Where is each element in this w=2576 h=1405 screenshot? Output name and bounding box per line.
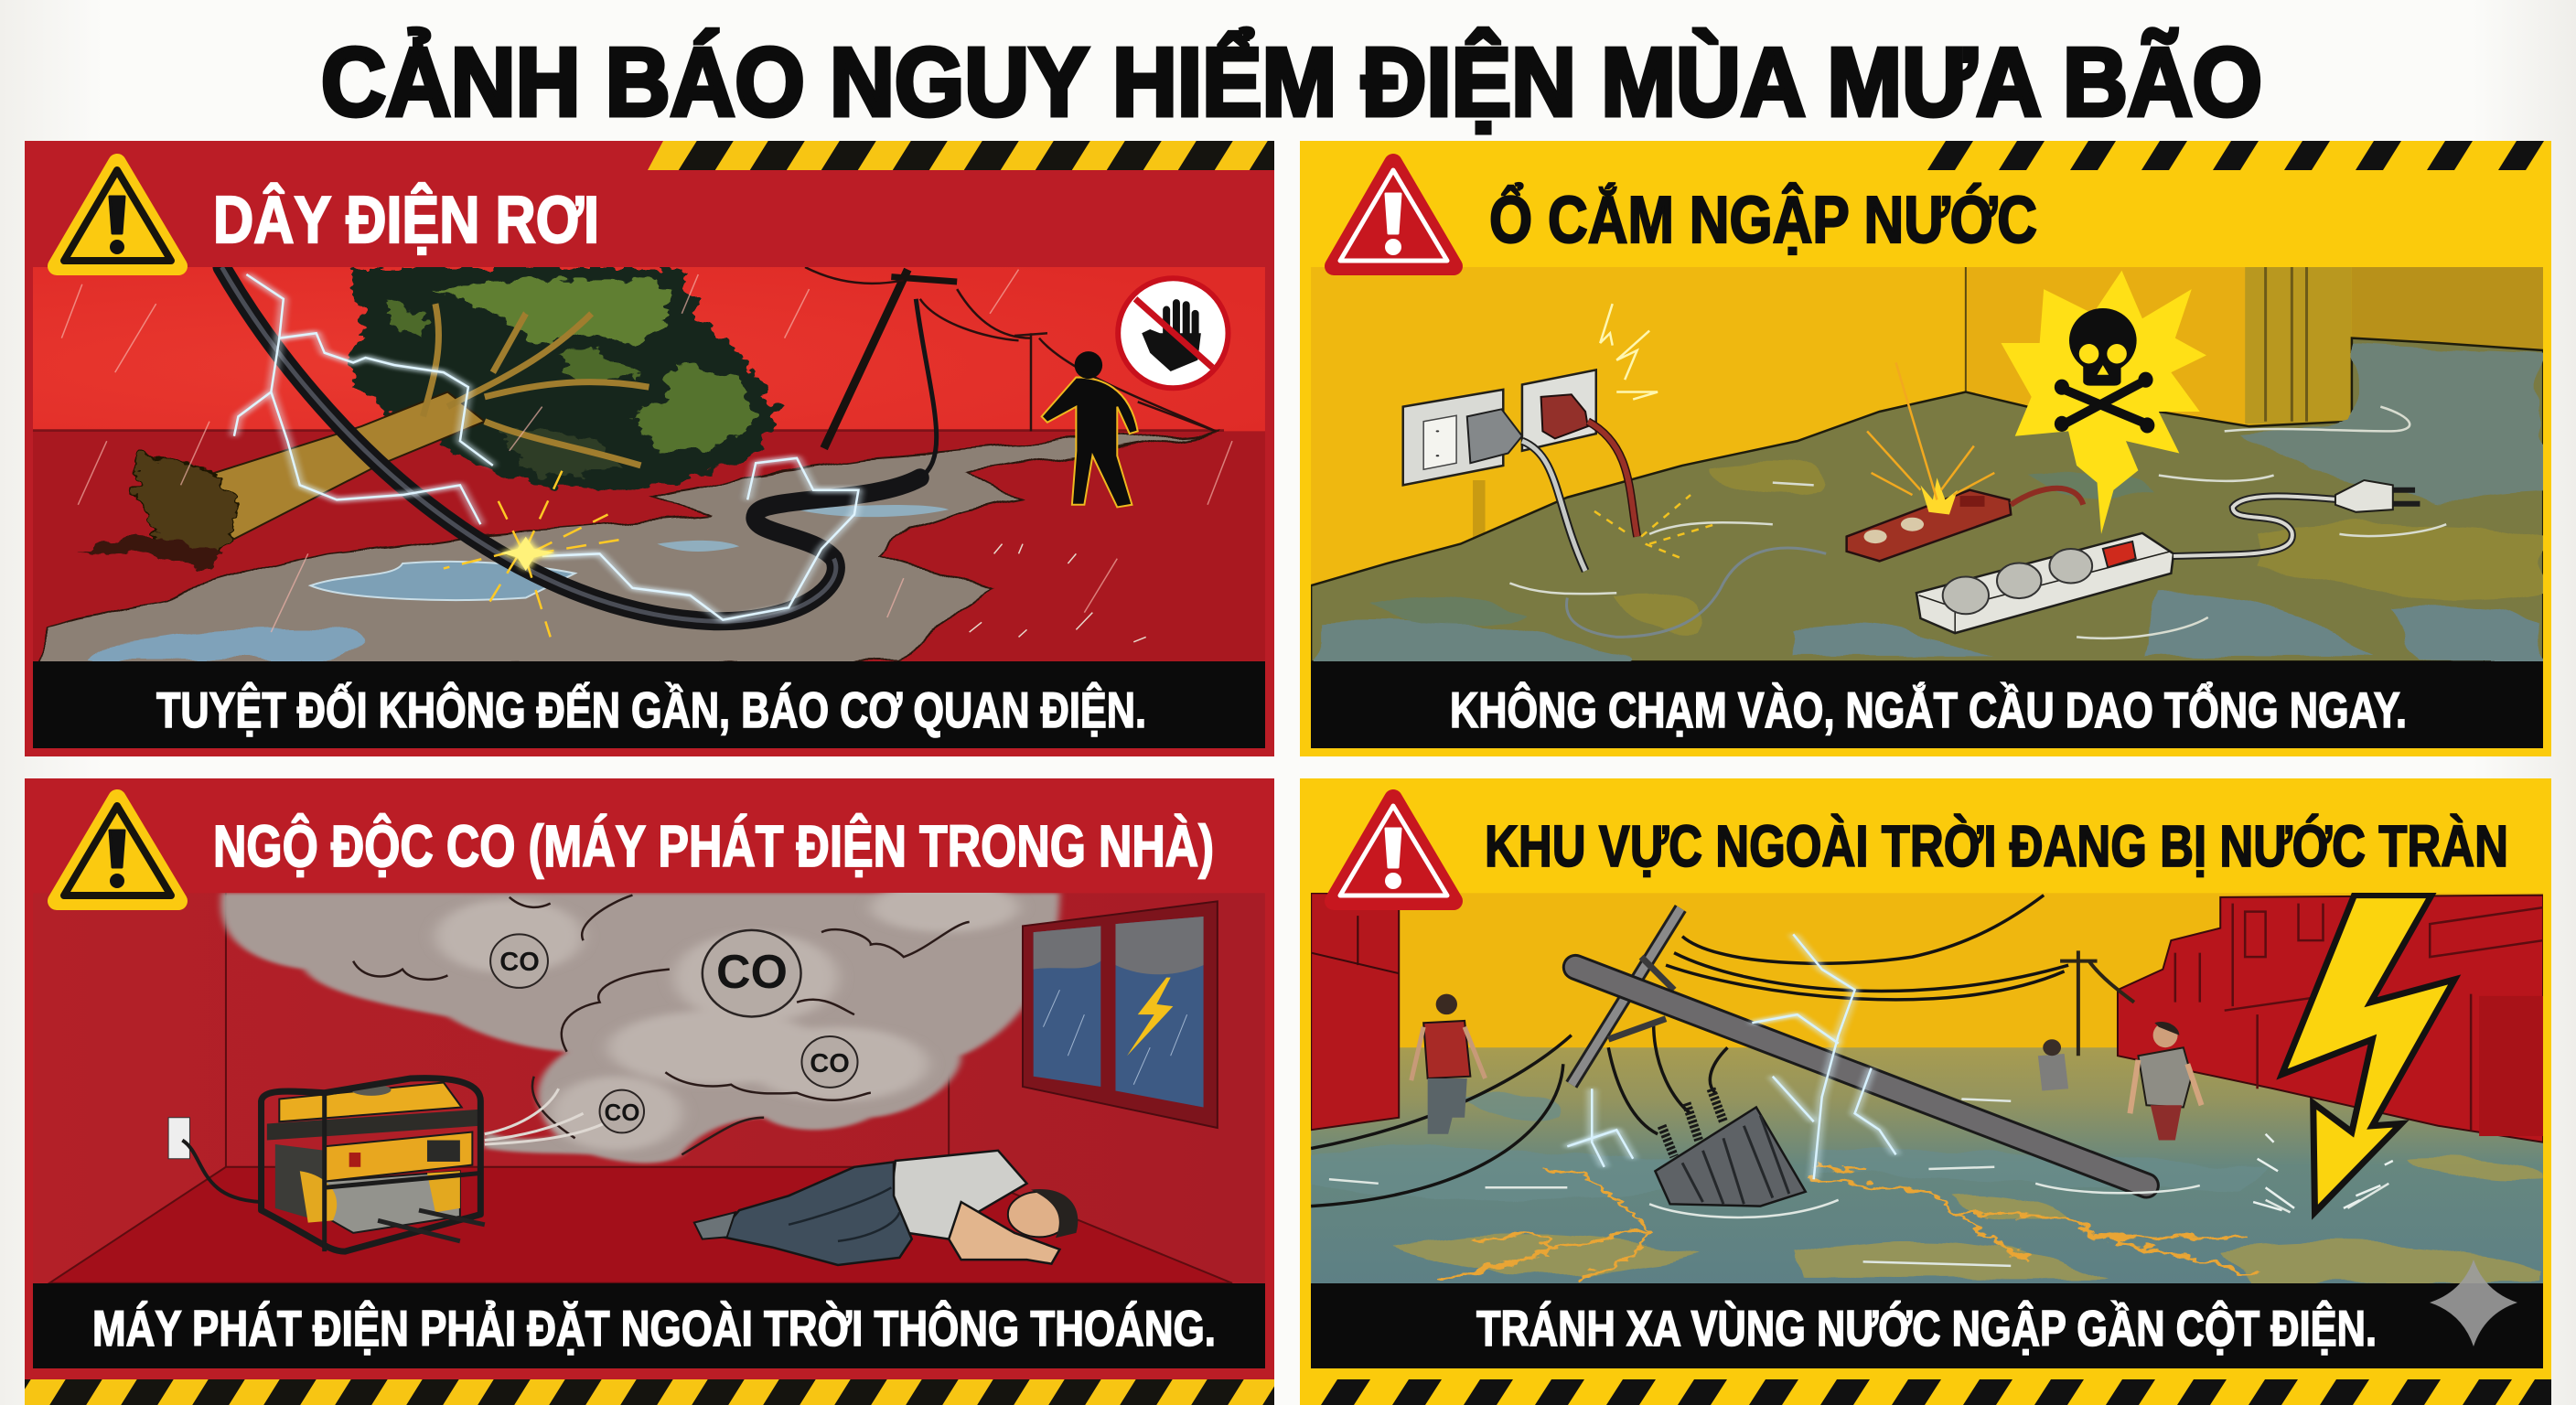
transformer <box>1655 1108 1806 1207</box>
fallen cable <box>221 267 920 621</box>
crossarm <box>1572 908 1680 1085</box>
ripples <box>1329 1099 2388 1266</box>
illustration: fallen line and tree <box>33 267 1265 671</box>
heading: DÂY ĐIỆN RƠI <box>213 183 599 257</box>
pedestrian <box>1042 377 1138 507</box>
heading: NGỘ ĐỘC CO (MÁY PHÁT ĐIỆN TRONG NHÀ) <box>213 812 1214 879</box>
flood <box>1311 338 2543 661</box>
title: CẢNH BÁO NGUY HIỂM ĐIỆN MÙA MƯA BÃO <box>321 27 2262 136</box>
warning icon <box>1334 799 1454 901</box>
buildings <box>1311 893 1399 1130</box>
illustration: generator indoors <box>33 883 1265 1284</box>
warning icon <box>1334 163 1454 266</box>
unconscious man <box>891 1151 1026 1239</box>
caption bar: TUYỆT ĐỐI KHÔNG ĐẾN GẦN, BÁO CƠ QUAN ĐIỆN. <box>156 681 1146 738</box>
caption bar <box>1311 1283 2543 1368</box>
hazard stripes <box>648 141 1274 170</box>
socket plates backing <box>1473 480 1486 539</box>
heading: Ổ CẮM NGẬP NƯỚC <box>1489 183 2037 257</box>
CO labels: CO <box>716 946 788 999</box>
CO labels: CO <box>604 1099 640 1126</box>
tree <box>345 267 777 490</box>
panel: flooded sockets <box>1300 141 2551 756</box>
thin cable <box>1567 548 1826 637</box>
no-touch sign <box>1118 278 1229 388</box>
wall outlet <box>168 1118 189 1159</box>
hazard stripes <box>1927 141 2544 170</box>
hazard stripes <box>1321 1379 2551 1405</box>
caption bar: MÁY PHÁT ĐIỆN PHẢI ĐẶT NGOÀI TRỜI THÔNG THOÁNG. <box>92 1300 1216 1357</box>
pole <box>824 270 907 448</box>
illustration: flooded sockets <box>1311 267 2543 667</box>
lightning <box>234 274 858 620</box>
illustration: toppled pole in flood <box>1311 893 2543 1284</box>
warning icon <box>57 163 178 266</box>
window <box>1023 901 1218 1128</box>
fallen pole <box>1575 967 2146 1185</box>
CO labels: CO <box>810 1049 850 1078</box>
panel: CO poisoning <box>25 778 1274 1405</box>
road <box>37 431 1220 671</box>
caption bar <box>1311 661 2543 748</box>
warning icon <box>57 799 178 901</box>
CO badges <box>490 934 548 988</box>
big lightning bolt <box>2282 896 2454 1212</box>
wall sockets <box>1403 370 1596 485</box>
white power strip <box>1916 533 2174 633</box>
panel: flooded outdoor area <box>1300 778 2551 1405</box>
hazard stripes <box>25 1379 1274 1405</box>
panel: fallen power line <box>25 141 1274 756</box>
rain <box>61 270 1232 632</box>
caption bar <box>33 661 1265 748</box>
generator <box>275 1144 325 1223</box>
CO labels: CO <box>499 948 540 977</box>
smoke <box>221 893 1059 1164</box>
wires <box>1311 896 2068 1207</box>
skull burst <box>2001 271 2206 534</box>
sparks <box>444 461 624 637</box>
distant pole <box>2060 950 2134 1056</box>
CO labels <box>499 946 850 1126</box>
wading people <box>1423 1021 1470 1078</box>
red power strip <box>1847 490 2011 561</box>
sparkle watermark <box>2430 1260 2517 1346</box>
water patches <box>1311 1094 2543 1283</box>
lightning <box>1567 934 1896 1179</box>
caption bar <box>33 1283 1265 1368</box>
orange cracks <box>1444 1165 2258 1281</box>
